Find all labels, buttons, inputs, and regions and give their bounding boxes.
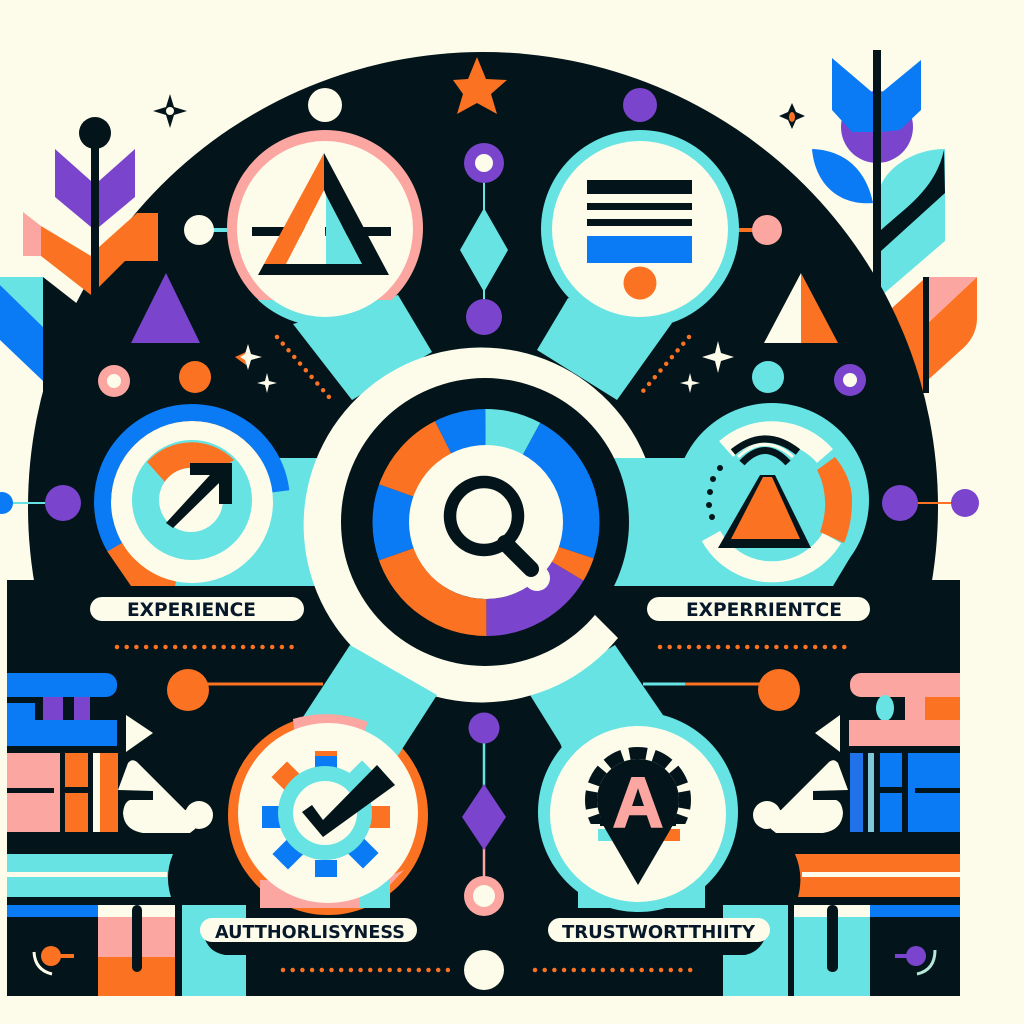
- label: experience left: [90, 597, 304, 621]
- check mark: [302, 765, 395, 837]
- top cream dot: [308, 88, 342, 122]
- top-right plant decoration: [812, 50, 945, 296]
- magnifier icon: [450, 482, 531, 569]
- right orange and pink leaf: [892, 277, 977, 392]
- label: experience left: EXPERIENCE: [127, 599, 256, 621]
- left white triangle: [126, 715, 153, 752]
- lollipop right: [643, 669, 800, 711]
- node: upper left connector: [184, 215, 232, 245]
- warning triangle: [718, 475, 811, 548]
- label: authoritativeness: AUTTHORLISYNESS: [215, 923, 405, 943]
- gear pin icon: [578, 753, 698, 885]
- left blue and teal banner: [0, 277, 43, 381]
- arm teal upper right: [537, 298, 672, 400]
- panel: right triangle signal badge: [612, 403, 875, 600]
- right orange stripes: [795, 854, 960, 897]
- dotted line right: [660, 645, 845, 649]
- right sparkles and dotted line: [638, 337, 734, 397]
- lower centre connector column: [462, 712, 506, 916]
- bottom dotted line right: [535, 968, 692, 972]
- right node dots: [752, 361, 866, 396]
- top-left plant decoration: [23, 117, 158, 297]
- label: trustworthiness: TRUSTWORTTHIITY: [562, 923, 755, 943]
- label shadow left: [204, 936, 246, 955]
- lollipop left: [167, 669, 323, 711]
- arm teal lower right: [530, 645, 665, 748]
- bottom-left blocks: [7, 905, 246, 996]
- sparkle: top left: [153, 94, 187, 128]
- panel: upper right document badge: [541, 130, 739, 328]
- left node dots: [98, 361, 211, 397]
- arrow icon: [166, 463, 232, 528]
- dotted line left: [117, 645, 300, 649]
- right edge node: [882, 485, 979, 521]
- top centre star: [453, 57, 507, 114]
- donut chart: [391, 428, 581, 618]
- left edge node: [0, 485, 81, 521]
- dotted arc: [706, 465, 723, 520]
- left teal stripes: [7, 854, 173, 897]
- sparkle: top right: [779, 103, 805, 129]
- right black post: [923, 277, 929, 393]
- upper centre connector column: [460, 143, 508, 335]
- label: trustworthiness: [548, 918, 770, 943]
- panel: lower right gear pin badge: [538, 705, 738, 912]
- gear pin icon: A: [612, 764, 664, 843]
- panel: upper left triangle badge: [227, 130, 423, 326]
- left purple triangle: [131, 273, 200, 343]
- panel: lower left gear check badge: [228, 645, 437, 915]
- node: upper right connector: [735, 215, 782, 245]
- bottom cream dot: [464, 950, 504, 990]
- gear icon: [262, 751, 390, 877]
- right white triangle: [815, 715, 840, 752]
- right cream cloud shape: [753, 760, 848, 833]
- right two-tone triangle: [764, 273, 838, 343]
- document icon: [587, 180, 692, 300]
- left sparkles and dotted line: [235, 337, 329, 397]
- label: authoritativeness: [200, 918, 417, 943]
- arm teal upper left: [293, 295, 432, 400]
- bottom-right blocks: [723, 905, 960, 996]
- label shadow right: [723, 936, 766, 955]
- label: experience right: EXPERRIENTCE: [686, 599, 842, 621]
- bottom-right building blocks: [849, 673, 960, 832]
- panel: left arrow gauge badge: [103, 412, 330, 586]
- small bottom-right node icon: [895, 946, 935, 974]
- triangle icon: [252, 153, 391, 275]
- signal arcs: [733, 439, 798, 463]
- top purple dot: [623, 88, 657, 122]
- label: experience right: [647, 597, 870, 621]
- bottom dotted line left: [283, 968, 450, 972]
- bottom-left building blocks: [7, 673, 118, 832]
- small bottom-left node icon: [34, 946, 74, 974]
- donut centre: [409, 445, 563, 599]
- left cream cloud shape: [118, 760, 213, 833]
- central magnifier ring: [304, 347, 702, 702]
